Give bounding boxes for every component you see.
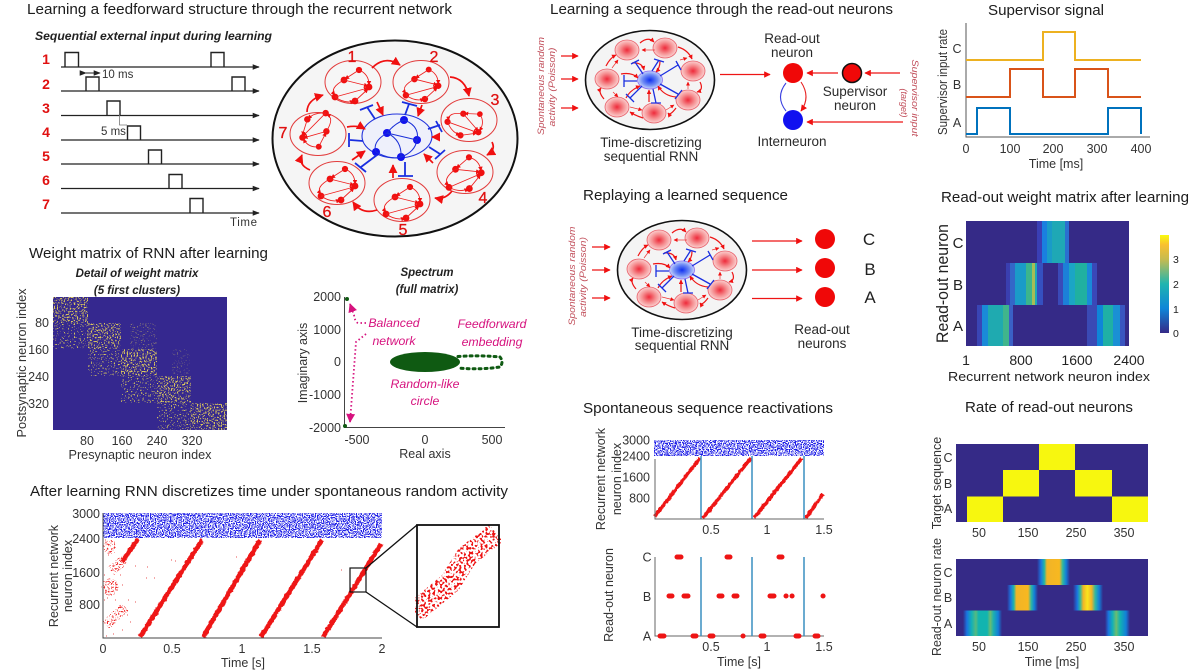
title: replaying sequence: Replaying a learned sequence	[583, 187, 788, 204]
chart: read-out spike raster	[602, 548, 833, 669]
y ticks: 1000	[313, 323, 341, 337]
x ticks: 0.5	[702, 640, 720, 654]
title: rate of read-out neurons: Rate of read-out neurons	[965, 399, 1133, 416]
label: balanced network: network	[372, 334, 416, 348]
row numbers: 3	[42, 100, 50, 116]
chart: RNN spike raster	[47, 507, 386, 670]
y tick labels: 240	[28, 370, 49, 384]
legend: colour bar: 1	[1173, 304, 1179, 316]
label: random-like circle	[390, 377, 460, 408]
inhibitory connections	[349, 102, 445, 176]
y tick labels	[28, 316, 49, 411]
balanced eigenvalues	[343, 297, 349, 428]
title: read-out weight matrix: Read-out weight matrix after learning	[941, 189, 1189, 206]
title: weight matrix: Weight matrix of RNN after learning	[29, 245, 268, 262]
y label: Read-out neuron rate	[930, 538, 944, 656]
dotted callout arrows	[350, 304, 366, 422]
y ticks: -1000	[309, 388, 341, 402]
cluster numbers: 1	[348, 49, 357, 66]
y ticks	[952, 42, 962, 130]
neuron letters: C	[863, 230, 875, 249]
y ticks: C	[943, 566, 953, 580]
label: supervisor neuron: Supervisor	[823, 84, 888, 99]
cluster 3	[441, 97, 497, 147]
label: read-out neuron	[764, 31, 820, 60]
legend: colour bar: 0	[1173, 328, 1179, 340]
y tick labels: 160	[28, 343, 49, 357]
x label: Real axis	[399, 447, 451, 461]
y ticks	[622, 434, 650, 506]
x ticks: 50	[972, 640, 986, 654]
title: time discretization: After learning RNN discretizes time under spontaneous random activity	[30, 483, 508, 500]
text: spontaneous input label	[567, 226, 588, 326]
x ticks: 2400	[1113, 352, 1145, 368]
x ticks: 100	[1000, 142, 1020, 156]
arrows: input into RNN	[592, 247, 610, 298]
recurrent read-out connections	[780, 82, 806, 111]
x ticks: 1.5	[815, 640, 833, 654]
x ticks	[972, 640, 1134, 654]
label: feedforward embedding: Feedforward	[457, 317, 528, 331]
subtitle: spectrum: (full matrix)	[396, 284, 458, 296]
x ticks: 350	[1114, 526, 1134, 540]
y label: Recurrent network	[47, 524, 61, 627]
y ticks: 3000	[622, 434, 650, 448]
row numbers: 7	[42, 196, 50, 212]
5 ms marker	[101, 115, 127, 138]
cluster numbers: 3	[491, 92, 500, 109]
cluster 4	[437, 150, 493, 195]
x ticks	[702, 523, 833, 537]
cluster numbers: 4	[479, 190, 488, 207]
y ticks: B	[643, 590, 651, 604]
diagram: time-discretizing RNN	[618, 220, 746, 320]
spikes	[660, 557, 823, 636]
cluster 1	[325, 60, 381, 104]
y ticks: C	[943, 451, 953, 465]
x ticks: 300	[1087, 142, 1107, 156]
y ticks	[642, 550, 652, 644]
chart: read-out rate heatmap	[930, 538, 1148, 669]
y ticks: C	[953, 235, 964, 252]
y ticks: 2000	[313, 290, 341, 304]
label: time-discretizing RNN: Time-discretizing	[600, 135, 702, 150]
title: learning a sequence: Learning a sequence through the read-out neurons	[550, 1, 893, 18]
cluster 6	[309, 162, 365, 204]
x ticks: 1	[764, 640, 771, 654]
x label: Time [s]	[717, 655, 761, 669]
random-like circle	[390, 352, 460, 372]
y ticks: 1600	[622, 470, 650, 484]
inset: zoomed raster	[366, 525, 499, 627]
y ticks: B	[944, 591, 952, 605]
zoom selection	[350, 568, 366, 592]
x ticks	[962, 352, 1145, 368]
reset markers	[701, 557, 804, 636]
trace C	[966, 32, 1141, 60]
y label: Target sequence	[930, 437, 944, 529]
x ticks: 1600	[1061, 352, 1093, 368]
scattered spikes	[105, 543, 125, 625]
y tick labels: 320	[28, 397, 49, 411]
x ticks: 350	[1114, 640, 1134, 654]
excitatory connections	[301, 61, 493, 211]
x ticks: 250	[1066, 526, 1086, 540]
read-out neuron	[783, 63, 803, 83]
y ticks: B	[944, 477, 952, 491]
y ticks: A	[944, 502, 953, 516]
y ticks: A	[953, 116, 962, 130]
text: spontaneous input label: Spontaneous random	[536, 36, 546, 135]
10 ms marker: 10 ms	[102, 69, 134, 81]
feedforward dotted ring	[458, 356, 502, 369]
cluster numbers	[279, 49, 500, 239]
x ticks: 800	[1009, 352, 1033, 368]
cluster 2	[393, 60, 449, 104]
x ticks: 500	[482, 433, 502, 447]
y ticks	[953, 235, 964, 335]
x ticks: 1	[764, 523, 771, 537]
y ticks: -2000	[309, 421, 341, 435]
inhibitory spikes	[103, 513, 382, 538]
y ticks	[72, 507, 100, 612]
cluster numbers: 2	[430, 49, 439, 66]
panel: sequential input timing diagram	[42, 51, 259, 229]
time axes	[61, 67, 259, 213]
label: balanced network: Balanced	[368, 316, 421, 330]
y ticks: B	[953, 78, 961, 92]
x ticks: 1.5	[303, 642, 321, 656]
x ticks: 0	[100, 642, 107, 656]
x ticks: 50	[972, 526, 986, 540]
cluster numbers: 6	[323, 204, 332, 221]
x ticks: -500	[344, 433, 370, 447]
x ticks: 2	[379, 642, 386, 656]
cluster 7	[290, 105, 346, 156]
y axis label: Postsynaptic neuron index	[15, 288, 29, 438]
x ticks: 0.5	[163, 642, 181, 656]
label: time-discretizing RNN	[631, 325, 733, 353]
x label: Recurrent network neuron index	[948, 369, 1151, 384]
y ticks: A	[643, 630, 652, 644]
y ticks: 800	[79, 598, 100, 612]
text: spontaneous input label	[536, 36, 557, 135]
y ticks: 2400	[622, 450, 650, 464]
time label: Time	[230, 217, 257, 229]
sequence bands	[655, 458, 823, 518]
label: read-out neurons	[794, 322, 850, 351]
legend: colour bar: 3	[1173, 254, 1179, 266]
label: random-like circle: circle	[411, 394, 440, 408]
label: feedforward embedding	[457, 317, 528, 349]
y label: Read-out neuron	[933, 224, 952, 343]
x ticks: 0.5	[702, 523, 720, 537]
x ticks	[100, 642, 386, 656]
x ticks: 1.5	[815, 523, 833, 537]
y ticks: B	[953, 277, 963, 294]
x ticks: 400	[1131, 142, 1151, 156]
label: supervisor input: Supervisor input	[910, 60, 920, 137]
y ticks	[943, 566, 953, 631]
label: supervisor neuron: neuron	[834, 98, 876, 113]
row C	[1037, 221, 1069, 263]
subtitle: spectrum	[396, 267, 458, 296]
cluster numbers: 5	[399, 222, 408, 239]
label: read-out neurons: neurons	[798, 336, 847, 351]
chart: weight matrix heatmap	[15, 288, 227, 462]
axes	[103, 513, 382, 638]
x ticks: 0	[422, 433, 429, 447]
x axis label: Presynaptic neuron index	[68, 448, 212, 462]
interneuron	[783, 110, 803, 130]
chart: read-out weight heatmap	[933, 221, 1151, 384]
x ticks	[344, 433, 502, 447]
excitatory sequence bands	[122, 539, 381, 637]
x ticks: 150	[1018, 640, 1038, 654]
supervisor arrows	[807, 73, 903, 122]
diagram: replay outputs	[752, 229, 876, 351]
10 ms marker	[86, 69, 134, 81]
x ticks: 0	[963, 142, 970, 156]
label: read-out neuron: Read-out	[764, 31, 820, 46]
label: supervisor neuron	[823, 84, 888, 113]
label: supervisor input	[899, 60, 920, 137]
y label: neuron index	[61, 539, 75, 612]
chart: supervisor signal	[936, 23, 1151, 171]
row B	[1006, 263, 1097, 305]
y ticks: C	[642, 550, 652, 564]
arrow: RNN to read-out	[720, 74, 770, 76]
y ticks: 0	[334, 355, 341, 369]
diagram: time-discretizing RNN	[586, 30, 714, 130]
y ticks: 2400	[72, 532, 100, 546]
y label: Read-out neuron	[602, 548, 616, 642]
x tick labels: 80	[80, 434, 94, 448]
legend: colour bar	[1160, 235, 1179, 340]
x tick labels: 240	[147, 434, 167, 448]
x ticks: 200	[1043, 142, 1063, 156]
subtitle: detail of weight matrix: (5 first clusters)	[94, 285, 180, 297]
text: spontaneous input label: activity (Poisson)	[578, 237, 588, 317]
x ticks	[702, 640, 833, 654]
title: supervisor signal: Supervisor signal	[988, 2, 1104, 19]
text: spontaneous input label: activity (Poisson)	[547, 48, 557, 126]
text: spontaneous input label: Spontaneous random	[567, 226, 577, 326]
row numbers: 4	[42, 124, 50, 140]
y label	[594, 427, 624, 530]
x ticks: 250	[1066, 640, 1086, 654]
x ticks: 1	[962, 352, 970, 368]
y ticks: 3000	[72, 507, 100, 521]
label: supervisor input: (target)	[899, 88, 909, 118]
y ticks: 1600	[72, 566, 100, 580]
row numbers: 2	[42, 76, 50, 92]
cluster numbers: 7	[279, 125, 288, 142]
row numbers: 6	[42, 172, 50, 188]
label: feedforward embedding: embedding	[462, 335, 523, 349]
legend: colour bar: 2	[1173, 279, 1179, 291]
subtitle: detail of weight matrix: Detail of weight matrix	[76, 268, 199, 280]
label: time-discretizing RNN: sequential RNN	[635, 338, 729, 353]
row A	[977, 305, 1125, 346]
trace A	[966, 108, 1141, 134]
inhibitory hub	[362, 114, 432, 161]
label: time-discretizing RNN: sequential RNN	[604, 149, 698, 164]
subtitle: spectrum: Spectrum	[400, 267, 454, 279]
y ticks: A	[944, 617, 953, 631]
x tick labels: 320	[182, 434, 202, 448]
label: interneuron: Interneuron	[757, 134, 827, 149]
label: time-discretizing RNN: Time-discretizing	[631, 325, 733, 340]
reset markers	[701, 456, 804, 519]
input pulses	[65, 52, 245, 213]
x ticks	[972, 526, 1134, 540]
y ticks: A	[953, 318, 963, 335]
subtitle: sequential input: Sequential external input during learning	[35, 31, 272, 43]
neuron letters: B	[864, 260, 876, 279]
trace B	[966, 69, 1141, 97]
supervisor neuron	[842, 64, 862, 82]
neuron letters: A	[864, 288, 876, 307]
x label: Time [ms]	[1025, 655, 1079, 669]
label: time-discretizing RNN	[600, 135, 702, 164]
row numbers: 1	[42, 51, 50, 67]
x ticks	[963, 142, 1151, 156]
label: read-out neuron: neuron	[771, 45, 813, 60]
y label: Imaginary axis	[296, 323, 310, 403]
subtitle: detail of weight matrix	[76, 268, 199, 297]
arrows: input into RNN	[561, 56, 578, 108]
y label	[47, 524, 75, 627]
y ticks: 800	[629, 492, 650, 506]
chart: eigenvalue spectrum	[296, 290, 528, 461]
y ticks	[943, 451, 953, 516]
x ticks: 150	[1018, 526, 1038, 540]
x ticks: 1	[239, 642, 246, 656]
inhibitory spikes	[654, 440, 824, 456]
x label: Time [ms]	[1029, 157, 1083, 171]
output arrows	[752, 241, 802, 298]
diagram: recurrent network with clusters	[272, 40, 518, 239]
row numbers	[42, 51, 50, 212]
y tick labels: 80	[35, 316, 49, 330]
x tick labels	[80, 434, 202, 448]
neuron letters	[863, 230, 876, 307]
diagram: read-out circuit	[720, 31, 920, 149]
cluster 5	[374, 178, 430, 222]
title: feedforward structure: Learning a feedforward structure through the recurrent network	[27, 1, 453, 18]
title: spontaneous reactivations: Spontaneous sequence reactivations	[583, 400, 833, 417]
chart: reactivation raster	[594, 427, 833, 537]
y label: Recurrent network	[594, 427, 608, 530]
row numbers: 5	[42, 148, 50, 164]
y ticks	[309, 290, 341, 435]
label: read-out neurons: Read-out	[794, 322, 850, 337]
y label: neuron index	[610, 442, 624, 515]
5 ms marker: 5 ms	[101, 126, 126, 138]
x label: Time [s]	[221, 656, 265, 670]
label: balanced network	[368, 316, 421, 348]
y ticks: C	[952, 42, 962, 56]
label: random-like circle: Random-like	[390, 377, 460, 391]
x tick labels: 160	[112, 434, 132, 448]
chart: target sequence heatmap	[930, 437, 1148, 540]
read-out neurons	[815, 229, 835, 307]
y label: Supervisor input rate	[936, 29, 950, 135]
